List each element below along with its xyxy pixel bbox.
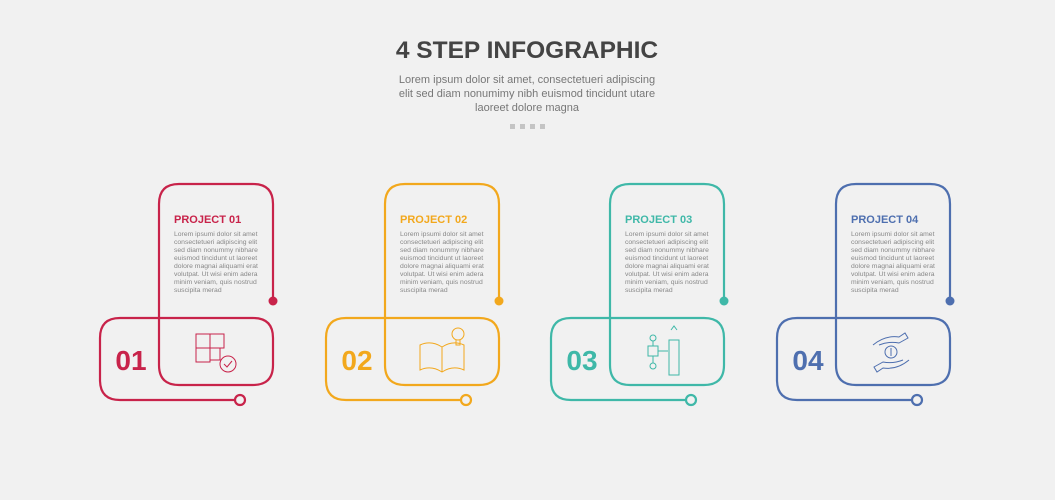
step 4: volutpat. Ut wisi enim adera (851, 271, 935, 278)
step 1 (100, 184, 278, 405)
step 4: minim veniam, quis nostrud (851, 279, 934, 286)
step 3: sed diam nonummy nibhare (625, 247, 709, 254)
step 4: dolore magnai aliquami erat (851, 263, 935, 270)
text: Lorem ipsumi dolor sit amet (174, 231, 258, 238)
text: consectetueri adipiscing elit (174, 239, 257, 246)
step 4: euismod tincidunt ut laoreet (851, 255, 934, 262)
text (115, 214, 258, 376)
step 2: dolore magnai aliquami erat (400, 263, 484, 270)
text: suscipita merad (174, 287, 222, 294)
step 3: consectetueri adipiscing elit (625, 239, 708, 246)
text: volutpat. Ut wisi enim adera (174, 271, 258, 278)
step 2 (326, 184, 504, 405)
icon: book with bulb (420, 328, 464, 372)
step 3: volutpat. Ut wisi enim adera (625, 271, 709, 278)
step 3: dolore magnai aliquami erat (625, 263, 709, 270)
step 4: suscipita merad (851, 287, 899, 294)
text: sed diam nonummy nibhare (174, 247, 258, 254)
title: 4 STEP INFOGRAPHIC (396, 37, 658, 64)
connector outline (777, 184, 950, 400)
text: minim veniam, quis nostrud (174, 279, 257, 286)
step 2: minim veniam, quis nostrud (400, 279, 483, 286)
subtitle: laoreet dolore magna (475, 102, 580, 114)
step 4: Lorem ipsumi dolor sit amet (851, 231, 935, 238)
step 4: PROJECT 04 (851, 214, 919, 226)
text: PROJECT 01 (174, 214, 241, 226)
step 2: volutpat. Ut wisi enim adera (400, 271, 484, 278)
dots decoration (510, 124, 545, 129)
step 3: euismod tincidunt ut laoreet (625, 255, 708, 262)
connector outline (551, 184, 724, 400)
step 3: suscipita merad (625, 287, 673, 294)
step 2: sed diam nonummy nibhare (400, 247, 484, 254)
step 3 (551, 184, 728, 405)
step 4: 04 (792, 345, 824, 376)
step 2: 02 (341, 345, 373, 376)
text: euismod tincidunt ut laoreet (174, 255, 257, 262)
step 3: minim veniam, quis nostrud (625, 279, 708, 286)
text: dolore magnai aliquami erat (174, 263, 258, 270)
step 2: Lorem ipsumi dolor sit amet (400, 231, 484, 238)
subtitle: Lorem ipsum dolor sit amet, consectetueri adipiscing (399, 74, 655, 86)
step 3: Lorem ipsumi dolor sit amet (625, 231, 709, 238)
step 4 (777, 184, 954, 405)
icon: puzzle (196, 334, 236, 372)
icon: flowchart and hand (648, 326, 679, 375)
subtitle: elit sed diam nonumimy nibh euismod tincidunt utare (399, 88, 655, 100)
icon: hands with coin (873, 333, 909, 372)
step 2: consectetueri adipiscing elit (400, 239, 483, 246)
step 2: PROJECT 02 (400, 214, 467, 226)
step 4: sed diam nonummy nibhare (851, 247, 935, 254)
step 2: euismod tincidunt ut laoreet (400, 255, 483, 262)
subtitle (399, 74, 655, 114)
connector outline (100, 184, 273, 400)
step 3: 03 (566, 345, 598, 376)
step 3: PROJECT 03 (625, 214, 692, 226)
connector outline (326, 184, 499, 400)
text: 01 (115, 345, 147, 376)
step 4: consectetueri adipiscing elit (851, 239, 934, 246)
step 2: suscipita merad (400, 287, 448, 294)
